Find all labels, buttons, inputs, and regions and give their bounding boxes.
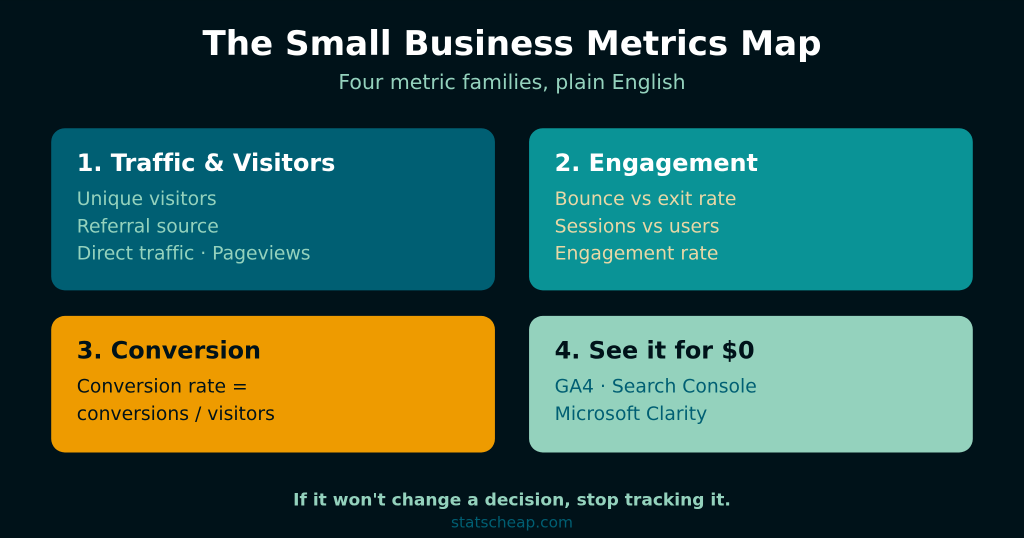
title: The Small Business Metrics Map bbox=[202, 24, 822, 64]
text block: conversion formula bbox=[77, 377, 275, 425]
text block: free tools list bbox=[555, 377, 757, 425]
text block: engagement metrics: Bounce vs exit rate bbox=[555, 189, 736, 210]
heading: see it for $0: 4. See it for $0 bbox=[555, 337, 755, 365]
text block: traffic metrics: Direct traffic · Pageviews bbox=[77, 244, 311, 265]
panel background: traffic bbox=[51, 128, 495, 290]
heading: conversion: 3. Conversion bbox=[77, 337, 261, 365]
text block: engagement metrics: Engagement rate bbox=[555, 244, 718, 265]
footer tagline: If it won't change a decision, stop tracking it. bbox=[293, 490, 731, 510]
panel: conversion bbox=[51, 316, 495, 452]
text block: engagement metrics: Sessions vs users bbox=[555, 216, 720, 237]
panel: engagement bbox=[529, 128, 973, 290]
panel: free tools bbox=[529, 316, 973, 452]
text block: traffic metrics bbox=[77, 189, 311, 265]
panel background: free tools bbox=[529, 316, 973, 452]
panel: traffic and visitors bbox=[51, 128, 495, 290]
panel background: conversion bbox=[51, 316, 495, 452]
footer source: statscheap.com bbox=[451, 514, 573, 532]
text block: traffic metrics: Referral source bbox=[77, 216, 219, 237]
text block: conversion formula: Conversion rate = bbox=[77, 377, 248, 398]
text block: free tools list: GA4 · Search Console bbox=[555, 377, 757, 398]
text block: engagement metrics bbox=[555, 189, 736, 265]
text block: traffic metrics: Unique visitors bbox=[77, 189, 217, 210]
subtitle: Four metric families, plain English bbox=[338, 70, 686, 94]
text block: free tools list: Microsoft Clarity bbox=[555, 404, 707, 425]
text block: conversion formula: conversions / visitors bbox=[77, 404, 275, 425]
panel background: engagement bbox=[529, 128, 973, 290]
heading: engagement: 2. Engagement bbox=[555, 149, 758, 177]
heading: traffic and visitors: 1. Traffic & Visitors bbox=[77, 149, 335, 177]
